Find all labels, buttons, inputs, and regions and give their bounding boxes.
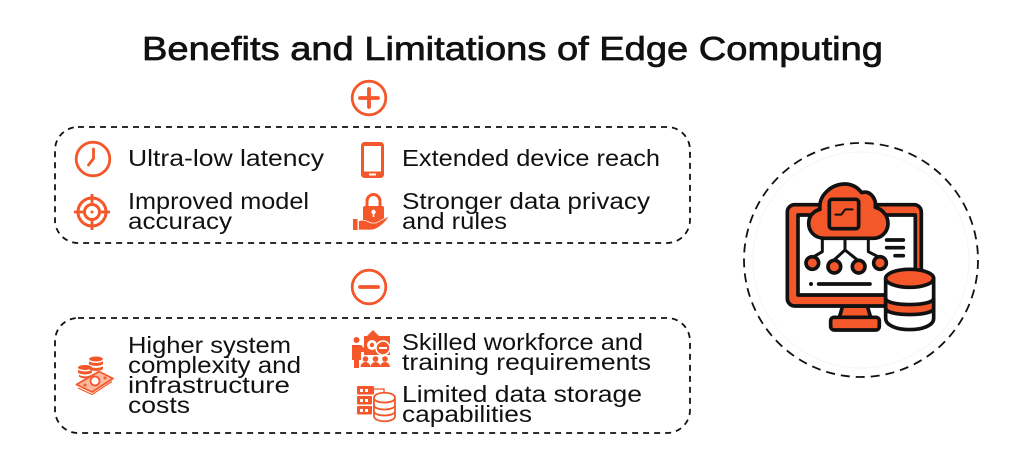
limitation: higher system complexity [128, 332, 301, 418]
benefit: stronger data privacy: and rules [402, 208, 507, 234]
benefit: improved model accuracy [128, 188, 309, 234]
limitation: skilled workforce: training requirements [402, 349, 651, 375]
monitor frame [787, 205, 921, 306]
icon: plus [352, 81, 386, 115]
limitation: higher system complexity: infrastructure [128, 372, 290, 398]
monitor stand [839, 306, 871, 317]
limitation: limited data storage: Limited data storage [402, 381, 642, 407]
icon: target [74, 194, 110, 230]
icon: workforce training [352, 330, 390, 368]
benefit: stronger data privacy [402, 188, 650, 234]
title: Benefits and Limitations of Edge Computing [142, 30, 883, 67]
icon: lock on hand [353, 195, 389, 230]
screen [798, 215, 915, 295]
chip [829, 199, 859, 229]
panel: benefits [55, 127, 690, 243]
limitation: higher system complexity: Higher system [128, 332, 291, 358]
limitation: limited data storage: capabilities [402, 401, 532, 427]
icon: minus [352, 270, 386, 304]
icon: data storage [357, 386, 395, 421]
benefit: stronger data privacy: Stronger data privacy [402, 188, 650, 214]
database cylinder [886, 269, 934, 330]
monitor base [831, 317, 879, 330]
cloud [809, 184, 888, 238]
benefit: extended device reach: Extended device reach [402, 145, 660, 171]
benefit: ultra-low latency: Ultra-low latency [128, 145, 324, 171]
icon: clock [76, 142, 110, 176]
limitation: limited data storage [402, 381, 642, 427]
limitation: higher system complexity: complexity and [128, 352, 301, 378]
icon: phone [361, 142, 384, 178]
benefit: improved model accuracy: Improved model [128, 188, 309, 214]
screen text lines [819, 240, 903, 284]
dashed circle [744, 143, 978, 377]
limitation: skilled workforce: Skilled workforce and [402, 329, 643, 355]
limitation: skilled workforce [402, 329, 651, 375]
icon: money and coins [76, 356, 113, 394]
panel: limitations [55, 318, 690, 433]
limitation: higher system complexity: costs [128, 392, 190, 418]
network nodes [806, 238, 886, 273]
icon: edge computing monitor [787, 184, 934, 330]
benefit: improved model accuracy: accuracy [128, 208, 232, 234]
